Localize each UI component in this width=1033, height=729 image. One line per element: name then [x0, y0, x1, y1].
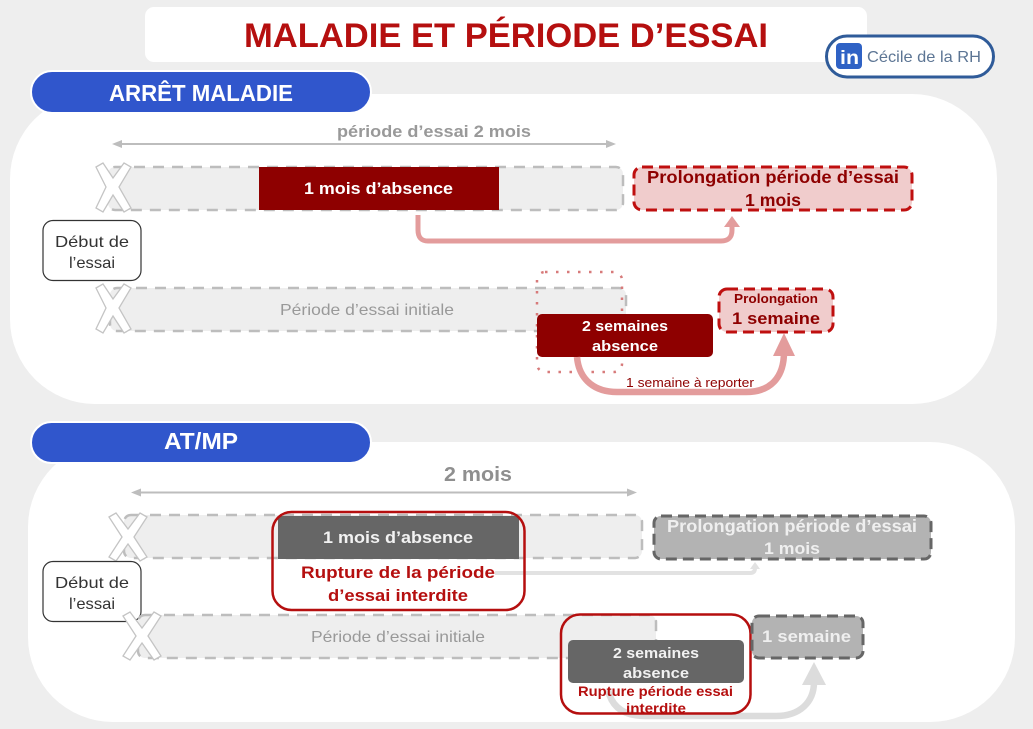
dotted overlap zone	[537, 272, 622, 372]
heading: arrêt maladie	[31, 71, 371, 113]
start label: Début de	[55, 234, 129, 251]
bar: initial period	[138, 615, 656, 658]
start label: Début de	[55, 575, 129, 592]
extension box: Prolongation période d’essai	[647, 167, 899, 187]
absence block	[278, 516, 519, 559]
logo: Cécile de la RH: Cécile de la RH	[867, 49, 981, 66]
absence block: 1 mois d’absence	[323, 529, 473, 547]
arrow caption: 1 semaine à reporter	[626, 376, 754, 390]
title	[145, 7, 867, 62]
warning: forbidden termination: d’essai interdite	[328, 586, 468, 605]
absence block: absence	[623, 666, 689, 682]
arrow: carry over	[577, 333, 795, 392]
start marker X	[96, 284, 131, 333]
logo: Cécile de la RH: in	[840, 48, 859, 69]
absence block: 1 mois d’absence	[304, 180, 453, 198]
start label: l’essai	[69, 596, 115, 613]
duration label: période d’essai 2 mois	[337, 122, 531, 141]
arrow: duration	[112, 140, 616, 148]
bar: trial period	[124, 515, 642, 558]
heading: arrêt maladie: ARRÊT MALADIE	[109, 79, 293, 106]
warning: forbidden termination	[272, 512, 524, 610]
warning: forbidden termination: Rupture de la période	[301, 563, 495, 582]
logo: Cécile de la RH	[826, 36, 994, 77]
absence block: 2 semaines	[582, 319, 668, 335]
bar: initial period	[110, 288, 626, 331]
extension box greyed: 1 mois	[764, 539, 820, 558]
extension box: Prolongation	[734, 292, 818, 306]
extension box	[719, 289, 833, 332]
extension box: 1 semaine	[732, 309, 820, 328]
arrow: report	[418, 215, 740, 241]
arrow: carry over greyed	[608, 662, 826, 716]
start marker X	[96, 163, 131, 212]
bar: initial period: Période d’essai initiale	[280, 302, 454, 319]
warning: forbidden termination: interdite	[626, 700, 686, 716]
extension box greyed	[654, 516, 931, 559]
heading: AT/MP	[31, 422, 371, 463]
title: MALADIE ET PÉRIODE D’ESSAI	[244, 17, 768, 55]
warning: forbidden termination: Rupture période essai	[578, 683, 733, 699]
absence block	[537, 314, 713, 357]
extension box: 1 mois	[745, 190, 801, 210]
absence block	[568, 640, 744, 683]
start marker X	[109, 513, 147, 561]
warning: forbidden termination	[561, 614, 750, 716]
extension box greyed	[752, 616, 863, 658]
start label: l’essai	[69, 255, 115, 272]
extension box greyed: Prolongation période d’essai	[667, 516, 917, 536]
absence block	[259, 167, 499, 210]
arrow: forbidden report	[495, 562, 760, 573]
start label	[43, 220, 141, 280]
bar: initial period: Période d’essai initiale	[311, 629, 485, 646]
extension box greyed: 1 semaine	[762, 627, 851, 646]
panel: arrêt maladie	[10, 71, 997, 404]
start label	[43, 562, 141, 622]
absence block: 2 semaines	[613, 646, 699, 662]
duration label: 2 mois	[444, 463, 512, 486]
arrow: duration	[131, 488, 637, 496]
start marker X	[123, 612, 161, 660]
heading: AT/MP: AT/MP	[164, 428, 238, 454]
extension box	[634, 167, 912, 210]
absence block: absence	[592, 339, 658, 355]
bar: trial period	[108, 167, 623, 210]
panel: AT/MP	[28, 422, 1015, 722]
